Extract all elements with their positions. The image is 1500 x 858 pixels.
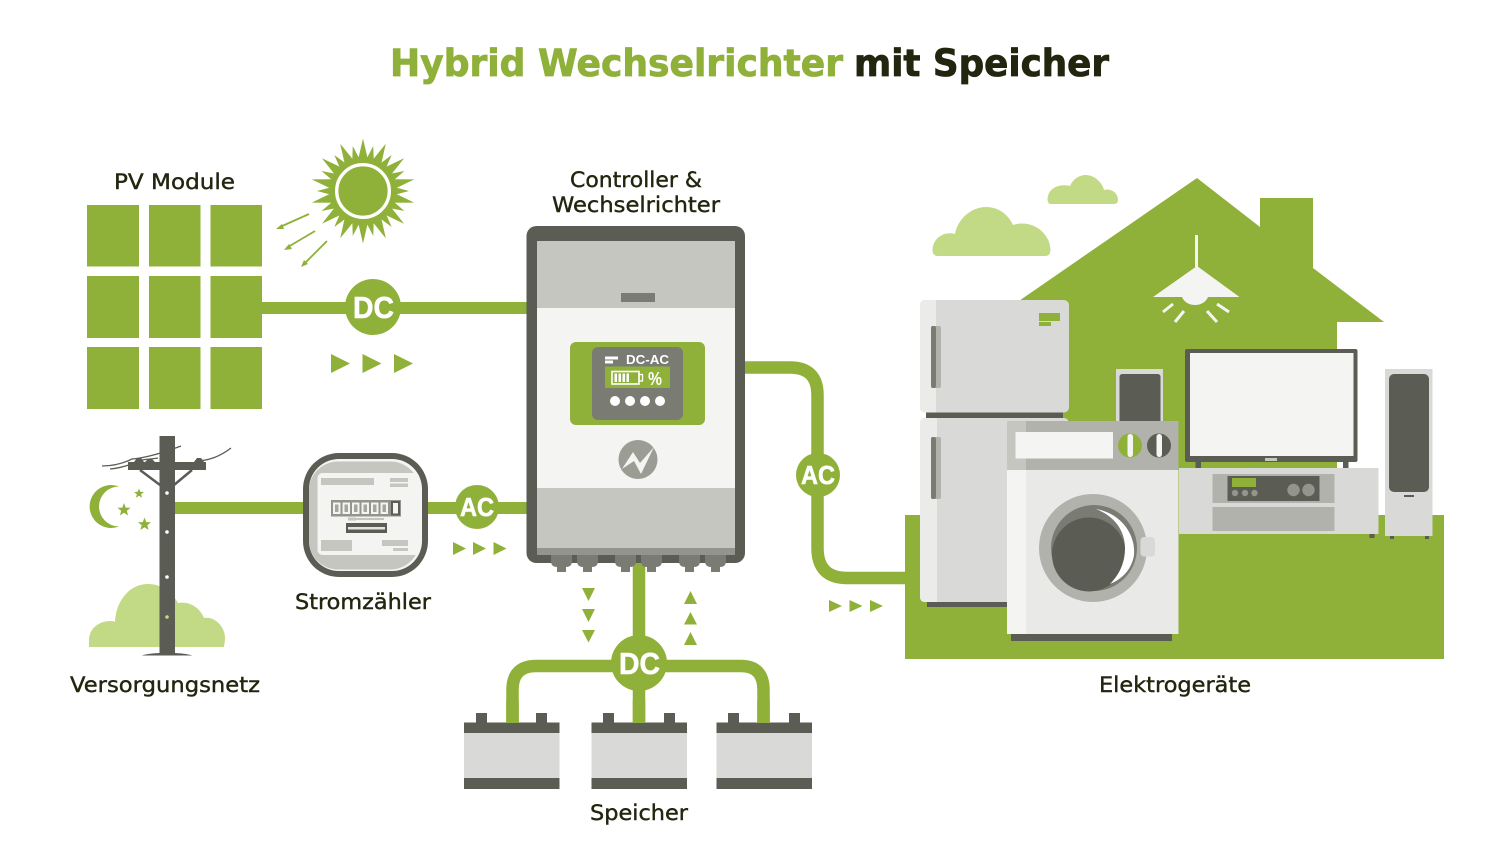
title: Hybrid Wechselrichter [390,42,844,85]
house [1000,178,1384,520]
label: Stromzähler: Stromzähler [295,590,431,614]
label: PV Module: PV Module [114,170,235,194]
badge: AC appliances: AC [801,460,835,490]
upper compartment [920,300,1069,412]
appliance: TV [1185,349,1358,468]
display panel [570,342,705,425]
label: Controller und Wechselrichter: Controller & [570,168,702,192]
door [1039,494,1155,602]
arrows: inverter to appliances [829,600,883,612]
lower compartment [920,418,1069,607]
title [390,42,1110,85]
label: Controller und Wechselrichter [552,168,720,217]
badge: DC: DC [353,290,394,325]
icon: clouds above house [932,175,1118,256]
appliance: fridge [920,300,1069,607]
appliance: TV stand [1179,468,1378,538]
icon: utility pole [102,436,231,656]
appliance: washing machine [1007,421,1178,641]
connection: DC lines from inverter to batteries [512,560,764,724]
badge: DC [345,279,401,335]
icon: cloud behind pole [89,584,225,647]
badge: AC grid: AC [460,492,494,522]
arrows: PV to inverter [331,354,413,373]
badge: DC battery [611,635,667,691]
connection: AC line from inverter to appliances [745,368,906,578]
control knobs [1118,434,1171,458]
badge: AC appliances [796,453,840,497]
display panel: DC-AC [626,352,670,367]
panel: controller and inverter [526,226,745,572]
arrows: from battery [684,591,697,645]
icon: sun [311,138,415,244]
cable glands [551,555,726,572]
batteries [464,713,812,789]
appliance: tall speaker [1385,369,1432,539]
logo [618,440,658,479]
badge: AC grid [455,485,499,529]
connection: DC line from PV modules to inverter [260,302,528,314]
icon: sun rays arrows [276,214,327,267]
label: Speicher: Speicher [590,801,688,825]
display panel: % [648,369,662,389]
appliance: small speaker [1116,369,1163,424]
title: mit Speicher [854,42,1110,85]
connectors over batteries [512,700,764,723]
label: Controller und Wechselrichter: Wechselrichter [552,193,720,217]
label: Versorgungsnetz: Versorgungsnetz [70,673,260,697]
arrows: grid to inverter [453,542,506,555]
ground [905,515,1444,659]
connection: AC line from grid to inverter [170,502,528,514]
arrows: to battery [582,588,595,642]
icon: moon and stars [90,485,151,530]
badge: DC battery: DC [619,646,660,681]
label: Elektrogeräte: Elektrogeräte [1099,673,1251,697]
icon: electricity meter [303,453,428,577]
icon: ceiling lamp [1153,235,1240,322]
panel: PV modules [87,205,262,409]
